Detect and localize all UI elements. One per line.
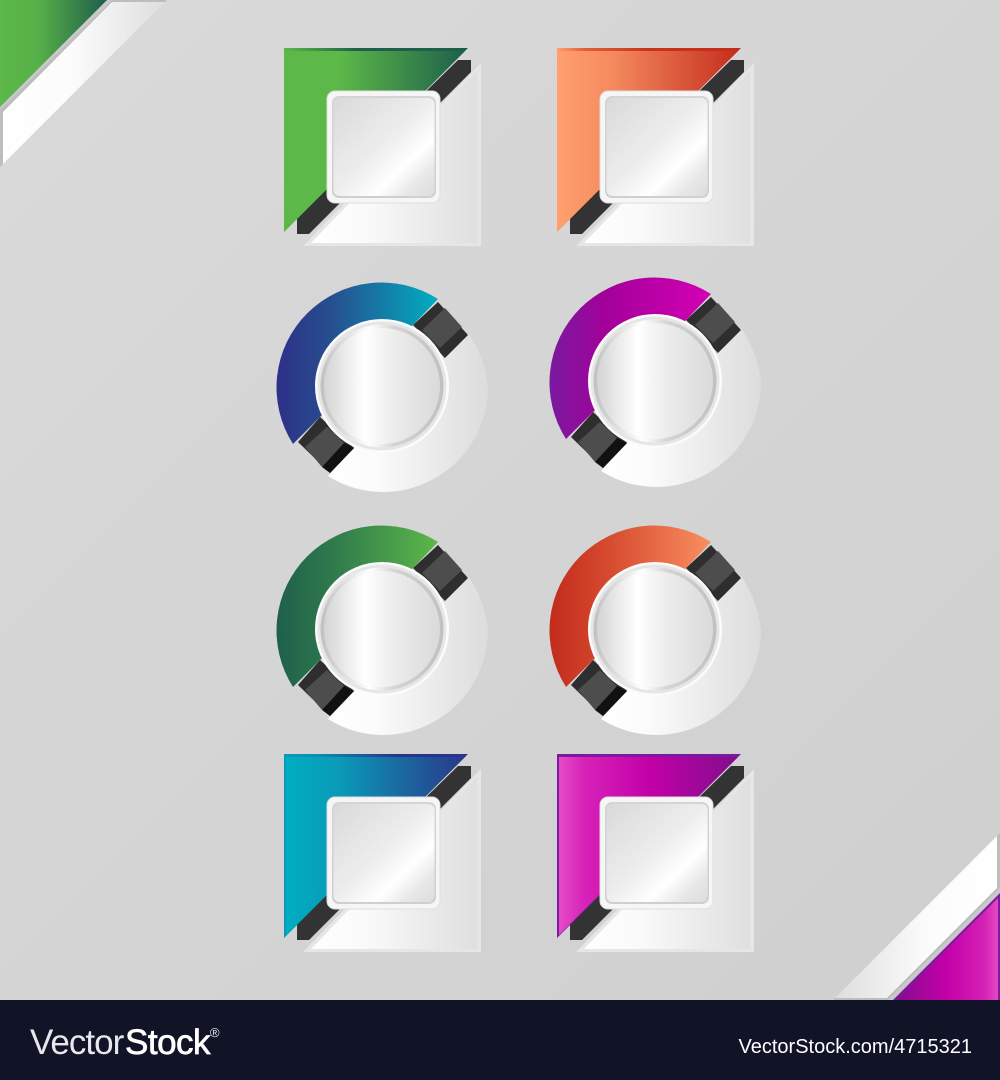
footer logo: VectorStock <box>30 1023 220 1062</box>
corner ribbon: top left <box>0 0 167 167</box>
circle badge: green <box>277 526 488 735</box>
corner ribbon: bottom right <box>833 833 1000 1000</box>
square badge: green <box>284 48 481 246</box>
square badge: magenta <box>557 754 754 952</box>
circle badge: red <box>550 526 761 735</box>
footer bar <box>0 1000 1000 1080</box>
footer image reference: VectorStock.com/4715321 <box>739 1036 972 1058</box>
circle badge: blue <box>277 283 488 492</box>
footer logo: VectorStock: Stock <box>125 1023 211 1062</box>
square badge: orange <box>557 48 754 246</box>
circle badge: purple <box>550 278 761 487</box>
footer logo: VectorStock: ® <box>210 1025 220 1040</box>
footer logo: VectorStock: Vector <box>30 1023 125 1062</box>
square badge: teal <box>284 754 481 952</box>
